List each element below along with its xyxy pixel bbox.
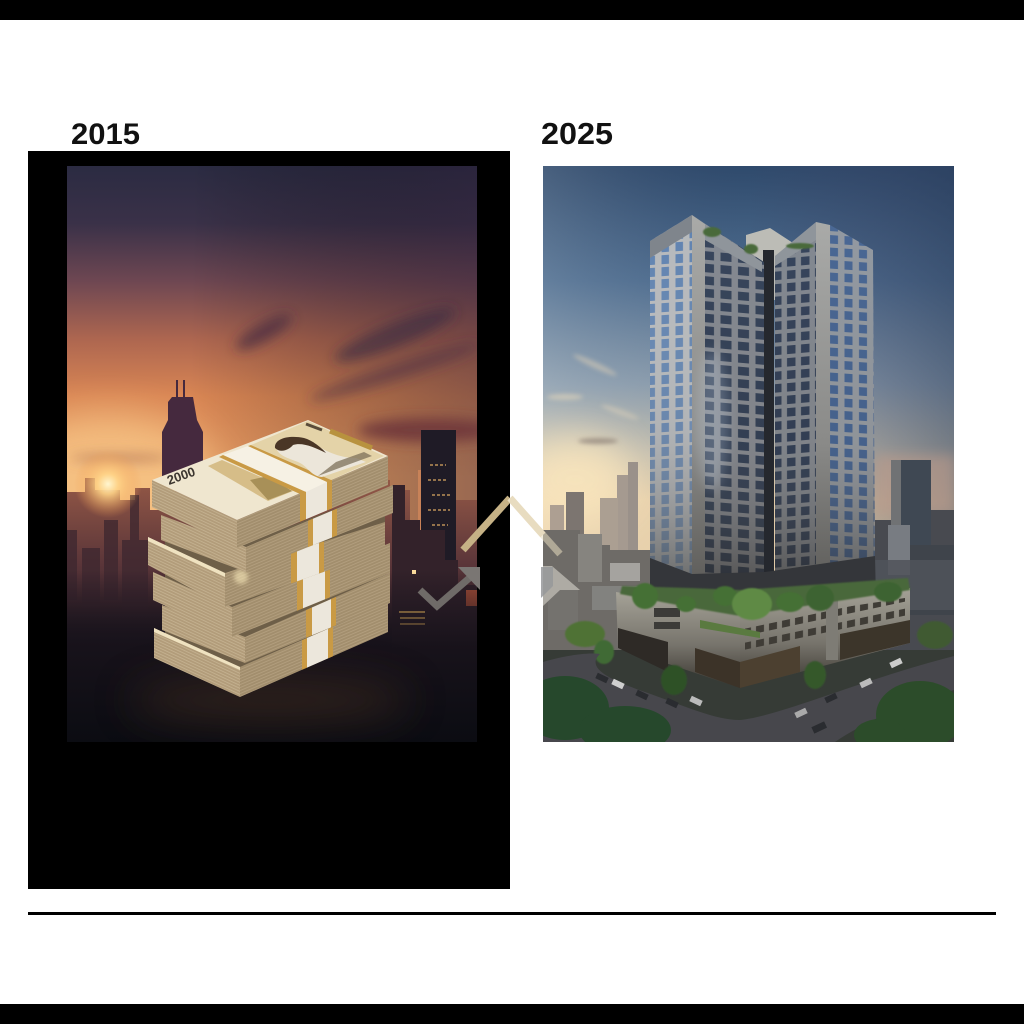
dusk sky xyxy=(543,166,954,571)
right side dusk shading xyxy=(214,166,477,520)
heading: 2015: 2015 xyxy=(71,118,140,151)
podium right face windows xyxy=(745,598,905,652)
apartment towers xyxy=(650,215,876,600)
roof gardens xyxy=(703,227,814,254)
sparkle xyxy=(234,570,248,584)
bundle 5 xyxy=(162,573,390,663)
foreground city blocks left xyxy=(67,495,148,588)
glass tower right xyxy=(891,460,931,545)
surrounding trees xyxy=(565,621,953,695)
stack of banknotes xyxy=(148,420,393,697)
warm glow under money xyxy=(130,676,410,724)
line on white gap xyxy=(510,498,543,535)
band on top face xyxy=(223,446,327,492)
bundle 4 xyxy=(153,543,390,637)
mid city left xyxy=(543,530,650,650)
left tower roof frame xyxy=(650,215,692,258)
central core xyxy=(746,228,793,300)
horizon glow xyxy=(515,435,635,525)
foreground trees right xyxy=(854,681,964,751)
right tower left face xyxy=(775,232,816,590)
landmark tower with spire xyxy=(162,380,203,476)
footer rule xyxy=(28,912,996,915)
distant skyline xyxy=(67,478,477,646)
thin clouds xyxy=(547,352,640,444)
bundle 2 xyxy=(161,485,393,572)
sun reflection on facade xyxy=(696,350,728,490)
podium corner pier xyxy=(826,600,838,660)
heading: 2025: 2025 xyxy=(541,116,613,151)
left tower right face lighting xyxy=(705,224,764,590)
banknote pattern xyxy=(208,460,293,501)
left tower left face xyxy=(650,215,692,590)
stack filler behind bundles xyxy=(165,490,385,690)
distant skyline right xyxy=(875,510,954,650)
bottom black bar xyxy=(0,1004,1024,1024)
bundle 6 bottom xyxy=(154,603,388,697)
panel: 2025 apartment tower photo xyxy=(543,166,954,742)
podium left face xyxy=(616,592,740,688)
sky side shading xyxy=(543,166,954,586)
left tower left face lighting xyxy=(650,255,692,574)
right tower left face lighting xyxy=(775,232,816,590)
foreground trees left xyxy=(521,676,671,754)
bundle 3 xyxy=(148,522,385,607)
lit windows xyxy=(399,570,478,625)
dark ground gradient xyxy=(67,570,477,742)
roof garden trees xyxy=(620,578,910,620)
icon: grey check arrow over 2015 photo xyxy=(420,567,480,606)
portrait on banknote xyxy=(251,421,384,480)
street xyxy=(543,654,954,742)
podium upper windows xyxy=(654,608,680,629)
sunset sky xyxy=(67,166,477,520)
right tower roof frame xyxy=(775,222,816,266)
line fading over photo xyxy=(543,535,560,554)
left tower right face xyxy=(705,224,764,590)
line on black panel xyxy=(463,498,510,550)
note denomination: 2000 xyxy=(165,464,197,488)
podium building xyxy=(616,588,910,688)
clouds xyxy=(70,300,502,462)
panel: 2015 black backing xyxy=(28,151,510,889)
ground base xyxy=(543,650,954,742)
bundle 1 top xyxy=(152,420,388,548)
podium right face xyxy=(740,588,910,688)
distant skyline left xyxy=(550,462,638,558)
right tower right face xyxy=(830,225,875,590)
right tower right face lighting xyxy=(830,225,875,590)
tall dark tower xyxy=(418,430,456,560)
right horizon warm tint xyxy=(875,455,955,515)
left tower corner pier xyxy=(692,215,705,590)
arrow fragment over 2025 photo xyxy=(541,567,553,598)
left tower parapet xyxy=(698,218,762,272)
top black bar xyxy=(0,0,1024,20)
dark tower base xyxy=(650,556,876,600)
panel: 2015 sunset city photo xyxy=(67,166,477,742)
mid city right xyxy=(875,525,955,615)
podium balcony planting xyxy=(700,620,760,638)
banknote top face xyxy=(152,420,388,520)
right tower corner pier xyxy=(816,222,830,590)
arrow: rising gold line xyxy=(463,498,560,554)
dark channel between towers xyxy=(763,250,774,600)
mid buildings left xyxy=(543,534,640,610)
parked cars xyxy=(595,658,903,734)
podium storefronts xyxy=(618,620,910,688)
sun disc xyxy=(78,458,140,516)
sun glow xyxy=(67,396,221,510)
lower city block xyxy=(392,485,477,604)
